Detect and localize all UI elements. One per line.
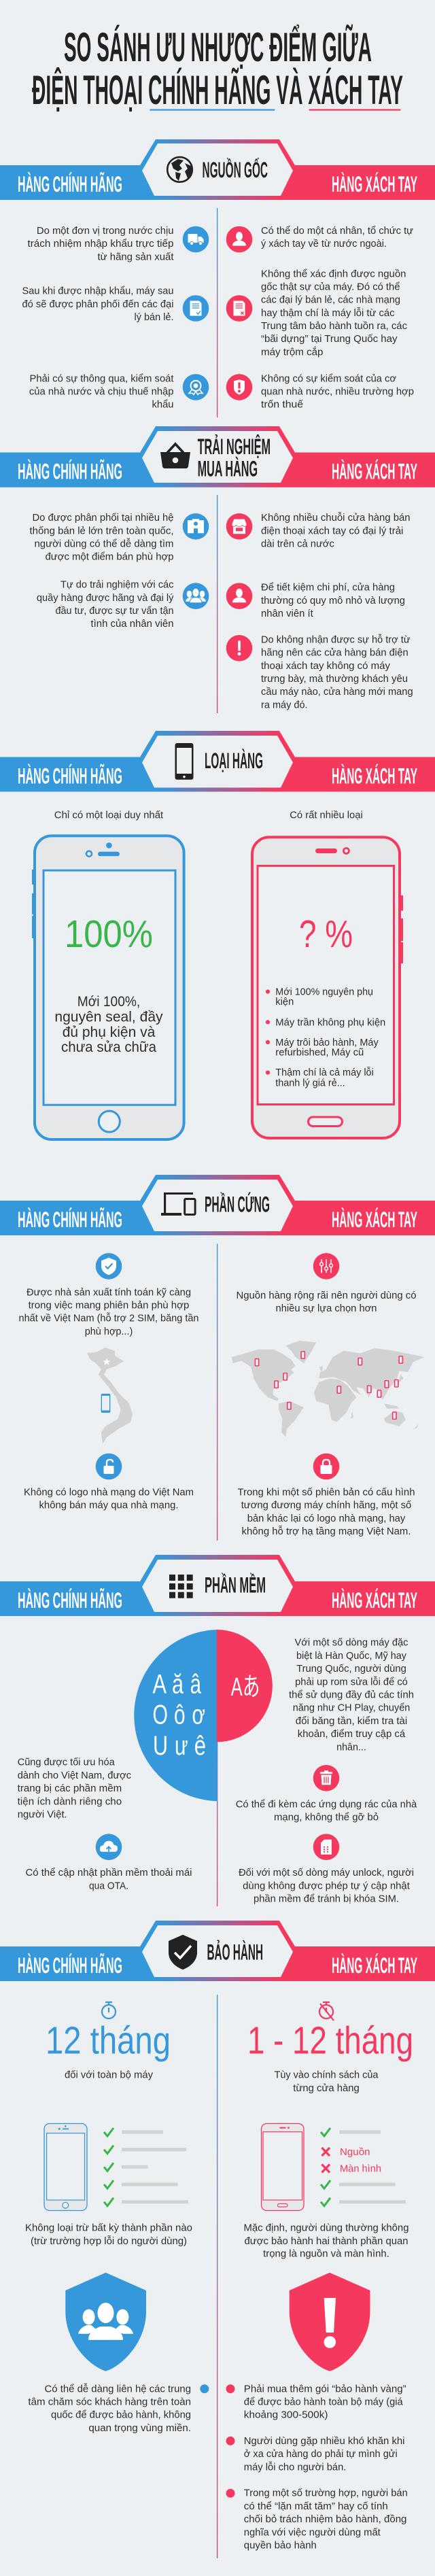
stat: ? %: ? % [299, 912, 353, 956]
text block: Có thể do một cá nhân, tổ chức tự [261, 225, 413, 237]
divider: phần mềm [217, 1630, 218, 1906]
text block [30, 512, 174, 563]
text block: ý xách tay về từ nước ngoài. [261, 238, 387, 250]
icon: person [226, 226, 252, 252]
text block [37, 579, 174, 630]
bullet text: ở xa cửa hàng do phải tự mình gửi [244, 2448, 398, 2460]
text block: Trung Quốc, người dùng [296, 1663, 406, 1675]
panel: bảo hành chính hãng [25, 2002, 209, 2434]
text block [275, 2070, 379, 2094]
icon: people [183, 583, 209, 609]
text block: đủ phụ kiện và [63, 1025, 156, 1040]
icon: person [226, 583, 252, 609]
panel: phần cứng xách tay [232, 1253, 424, 1537]
blue half circle: ă [172, 1670, 184, 1700]
text block [289, 1637, 414, 1753]
text block: được một điểm bán phù hợp [45, 551, 174, 563]
text block: Với một số dòng máy đặc [295, 1637, 408, 1649]
checklist: Nguồn [340, 2146, 370, 2158]
text block: qua OTA. [89, 1880, 128, 1891]
bullet list: thanh lý giá rẻ... [275, 1077, 345, 1089]
panel: phần mềm xách tay [236, 1637, 417, 1905]
bullet text: khoảng 300-500k) [244, 2409, 328, 2421]
text block: người dùng có thể dễ dàng tìm [34, 538, 174, 549]
text block: trốn thuế [261, 399, 304, 411]
text block: đối với toàn bộ máy [65, 2070, 153, 2081]
icon: shield check [169, 1935, 197, 1970]
text block: Do được phân phối tại nhiều hệ [33, 512, 174, 523]
blue half circle: O [152, 1700, 168, 1730]
blue half circle: ô [174, 1700, 186, 1730]
blue half circle: ơ [192, 1700, 205, 1730]
text block: nhất về Việt Nam (hỗ trợ 2 SIM, băng tần [19, 1313, 198, 1324]
text block [261, 225, 413, 250]
blue half circle: â [190, 1670, 202, 1700]
text block: bản khác lại có logo nhà mạng, hay [247, 1513, 406, 1524]
bullet text: nghĩa với việc người dùng mất [244, 2526, 381, 2538]
text block: dành cho Việt Nam, được [18, 1770, 132, 1781]
text block [25, 2222, 192, 2247]
text block: gốc thật sự của máy. Đó có thể [261, 281, 400, 292]
panel: nguồn gốc chính hãng [22, 225, 209, 411]
text block: Không thể xác định được nguồn [261, 268, 406, 279]
checklist [104, 2128, 188, 2206]
text block: Phải có sự thông qua, kiểm soát [30, 373, 174, 385]
text block: đầu tư, được sự tư vấn tận [56, 605, 174, 617]
bullet list: refurbished, Máy cũ [275, 1047, 364, 1059]
icon: document x [226, 295, 252, 322]
bullet text [226, 2488, 408, 2552]
text block: hãng nên các cửa hàng bán điện [261, 647, 408, 659]
text block [236, 1798, 417, 1823]
text block: không bán máy qua nhà mạng. [39, 1500, 178, 1511]
icon: phone [175, 743, 193, 780]
text block: Mặc định, người dùng thường không [243, 2222, 409, 2234]
divider: bảo hành [217, 1995, 218, 2558]
text block: cầu máy nào, cửa hàng mới mang [261, 686, 413, 698]
text block: “bãi dựng” tại Trung Quốc hay [261, 333, 398, 345]
divider: phần cứng [217, 1244, 218, 1541]
blue half circle: A [152, 1670, 167, 1700]
text block: quầy hàng được hãng và đại lý [37, 592, 174, 604]
bullet text [28, 2383, 209, 2434]
map: world with phones [232, 1341, 424, 1437]
icon: sim card [313, 1834, 339, 1860]
icon: exclamation [226, 635, 252, 662]
panel: phần cứng chính hãng [19, 1253, 198, 1511]
bullet list: Mới 100% nguyên phụ [275, 986, 373, 998]
section header: loại hàng: HÀNG CHÍNH HÃNG [18, 764, 122, 789]
section header: phần cứng: HÀNG CHÍNH HÃNG [18, 1207, 122, 1232]
section header: trải nghiệm mua hàng: MUA HÀNG [198, 457, 258, 481]
text block [261, 512, 411, 549]
text block [261, 634, 413, 711]
icon: shield alert [290, 2273, 370, 2371]
blue half circle: ê [194, 1731, 206, 1761]
section header: trải nghiệm mua hàng: TRẢI NGHIỆM [198, 434, 271, 459]
text block: Trung tâm bảo hành tuồn ra, các [261, 320, 407, 332]
text block: biệt là Hàn Quốc, Mỹ hay [296, 1650, 406, 1662]
text block: dùng không được phép tự ý cập nhật [243, 1880, 411, 1891]
icon: shield check [96, 1253, 122, 1280]
text block: khẩu [152, 399, 174, 411]
bullet text: máy lỗi cho người bán. [244, 2461, 346, 2473]
text block: thường có quy mô nhỏ và lượng [261, 595, 405, 606]
text block: tình của nhân viên [91, 618, 174, 630]
text block: năng như CH Play, chuyển [293, 1702, 410, 1714]
section header: phần cứng [0, 1175, 435, 1235]
text block: thể sử dụng đầy đủ các tính [289, 1689, 414, 1701]
text block: trọng là nguồn và màn hình. [263, 2248, 389, 2259]
text block: nhân viên ít [261, 608, 314, 619]
text block [19, 1286, 198, 1337]
section header: bảo hành: BẢO HÀNH [207, 1940, 263, 1965]
icon: award [183, 374, 209, 400]
text block [243, 2222, 409, 2259]
icon: devices [161, 1192, 195, 1216]
phone illustration: blue small [44, 2124, 87, 2211]
section header: loại hàng [0, 731, 435, 791]
bullet text: quốc để được bảo hành, không [51, 2409, 191, 2421]
section header: phần mềm: HÀNG CHÍNH HÃNG [18, 1588, 122, 1613]
phone illustration: blue [32, 836, 184, 1139]
text block: tương đương máy chính hãng, một số [241, 1500, 412, 1511]
panel: loại chính hãng [32, 809, 184, 1139]
bullet text: chối bỏ trách nhiệm bảo hành, đồng [244, 2513, 406, 2525]
text block: của nhà nước và chịu thuế nhập [29, 385, 174, 397]
icon: lock [313, 1454, 339, 1479]
text block: tiện ích dành riêng cho [18, 1796, 122, 1807]
text block: nhân... [336, 1741, 366, 1753]
icon: globe [167, 157, 192, 182]
text block: Do không nhận được sự hỗ trợ từ [261, 634, 411, 646]
text block: quan nhà nước, nhiều trường hợp [261, 385, 414, 397]
section header: bảo hành: HÀNG CHÍNH HÃNG [18, 1953, 122, 1978]
text block: Cũng được tối ưu hóa [18, 1757, 115, 1768]
text block [261, 268, 407, 358]
text block: dài trên cả nước [261, 538, 334, 549]
divider: nguồn gốc [217, 208, 218, 417]
text block [18, 1757, 132, 1821]
text block: trưng bày, mà thường khách yêu [261, 673, 408, 685]
phone illustration: red [252, 837, 403, 1138]
bullet text: có thể “lặn mất tăm” hay cố tính [244, 2501, 388, 2512]
text block: Đối với một số dòng máy unlock, người [239, 1867, 414, 1878]
text block: Không có logo nhà mạng do Việt Nam [24, 1486, 194, 1498]
bullet text: để được bảo hành toàn bộ máy (giá [244, 2396, 403, 2408]
section header: nguồn gốc: HÀNG CHÍNH HÃNG [18, 172, 122, 196]
icon: unlock [96, 1454, 122, 1479]
text block: nhiều sự lựa chọn hơn [276, 1303, 377, 1314]
text block: từng cửa hàng [293, 2082, 360, 2094]
map: Việt Nam [87, 1347, 133, 1444]
icon: stopwatch [102, 2002, 116, 2019]
icon: stopwatch off [319, 2002, 334, 2021]
text block: Có thể đi kèm các ứng dụng rác của nhà [236, 1798, 417, 1810]
text block: trong việc mang phiên bản phù hợp [29, 1300, 189, 1311]
bullet text: Có thể dễ dàng liên hệ các trung [45, 2383, 191, 2394]
bullet list: Máy trôi bảo hành, Máy [275, 1037, 379, 1048]
text block: đó sẽ được phân phối đến các đại [22, 298, 174, 310]
text block: hay thậm chí là máy lỗi từ các [261, 307, 395, 319]
section header: nguồn gốc [0, 139, 435, 200]
stat: 100%: 100% [65, 912, 153, 956]
text block: điện thoại xách tay có đại lý trải [261, 525, 403, 536]
panel: trải nghiệm chính hãng [30, 512, 209, 630]
text block: Không nhiều chuỗi cửa hàng bán [261, 512, 411, 523]
text block: Tự do trải nghiệm với các [60, 579, 174, 591]
text block [24, 1486, 194, 1511]
bullet text: Phải mua thêm gói “bảo hành vàng” [244, 2383, 406, 2394]
section header: trải nghiệm mua hàng [0, 426, 435, 487]
section header: bảo hành [0, 1921, 435, 1981]
text block: từ hãng sản xuất [98, 252, 174, 262]
icon: store [226, 513, 252, 540]
section header: phần mềm: PHẦN MỀM [205, 1573, 266, 1598]
text block: Có thể cập nhật phần mềm thoải mái [26, 1867, 192, 1878]
text block: nguyên seal, đầy [54, 1010, 163, 1025]
text block [26, 1867, 192, 1891]
section header: phần cứng: PHẦN CỨNG [205, 1192, 270, 1217]
bullet text: quan trọng vùng miền. [88, 2422, 191, 2434]
text block: Tùy vào chính sách của [275, 2070, 379, 2081]
text block: đổi băng tần, kiểm tra tài [296, 1715, 407, 1727]
text block: phải up rom sửa lỗi để có [295, 1676, 408, 1687]
text block: thoại xách tay không có máy [261, 660, 390, 672]
text block: trách nhiệm nhập khẩu trực tiếp [27, 238, 173, 250]
text block [261, 582, 405, 619]
text block [238, 1486, 415, 1537]
panel: trải nghiệm xách tay [226, 512, 413, 711]
icon: truck [183, 226, 209, 252]
panel: nguồn gốc xách tay [226, 225, 414, 411]
text block: mạng, không thể gỡ bỏ [274, 1811, 379, 1823]
panel: bảo hành xách tay [226, 2002, 413, 2552]
chart: language half circles [134, 1630, 273, 1801]
text block: Trong khi một số phiên bản có cấu hình [238, 1486, 415, 1498]
checklist: Màn hình [340, 2163, 381, 2174]
section header: trải nghiệm mua hàng: HÀNG CHÍNH HÃNG [18, 460, 122, 484]
text block: Do một đơn vị trong nước chịu [37, 225, 174, 237]
red half circle [217, 1630, 273, 1742]
blue half circle [134, 1630, 218, 1801]
bullet text [226, 2435, 405, 2473]
icon: shield people [65, 2273, 146, 2371]
panel: loại xách tay [252, 809, 403, 1138]
icon: trash [313, 1765, 339, 1791]
red half circle: Aあ [231, 1673, 260, 1702]
blue half circle: U [153, 1731, 168, 1761]
icon: cloud upload [96, 1834, 122, 1860]
text block: khoản, điểm truy cập cá [298, 1728, 406, 1740]
text block: phần mềm để tránh bị khóa SIM. [254, 1893, 399, 1905]
text block: (trừ trường hợp lỗi do người dùng) [31, 2235, 187, 2247]
icon: shield alert [226, 374, 252, 400]
checklist [321, 2128, 406, 2206]
panel: phần mềm chính hãng [18, 1757, 192, 1891]
icon: apple store [183, 513, 209, 540]
text block: Được nhà sản xuất tính toán kỹ càng [27, 1286, 191, 1298]
phone illustration: red small [261, 2124, 304, 2211]
text block [54, 994, 163, 1055]
text block: Nguồn hàng rộng rãi nên người dùng có [237, 1290, 416, 1301]
section header: phần mềm [0, 1555, 435, 1616]
stat: 12 tháng: 12 tháng [46, 2019, 171, 2063]
label: nhiều loại: Có rất nhiều loại [290, 809, 363, 821]
text block: Sau khi được nhập khẩu, máy sau [22, 286, 174, 297]
text block: ra máy đó. [261, 699, 308, 711]
text block: không hỗ trợ hạ tầng mạng Việt Nam. [242, 1526, 411, 1537]
text block: Để tiết kiệm chi phí, cửa hàng [261, 582, 395, 594]
text block [22, 286, 174, 323]
section header: loại hàng: LOẠI HÀNG [205, 749, 263, 773]
text block: Không loại trừ bất kỳ thành phần nào [25, 2222, 192, 2234]
title [32, 24, 403, 113]
text block: Mới 100%, [77, 994, 140, 1010]
blue half circle: ư [175, 1731, 188, 1761]
text block [261, 373, 414, 411]
text block [29, 373, 174, 411]
text block: thống bán lẻ lớn trên toàn quốc, [30, 525, 174, 536]
bullet text: quyền bảo hành [244, 2540, 317, 2552]
text block: các đại lý bán lẻ, các nhà mạng [261, 294, 400, 306]
section header: nguồn gốc: NGUỒN GỐC [203, 158, 268, 182]
text block: trang bị các phần mềm [18, 1783, 122, 1794]
divider: trải nghiệm [217, 495, 218, 713]
text block: phù hợp...) [85, 1326, 133, 1337]
icon: app grid [169, 1575, 193, 1598]
text block: Không có sự kiểm soát của cơ [261, 373, 396, 385]
bullet list: kiện [275, 996, 294, 1008]
icon: sliders [313, 1253, 339, 1280]
bullet text: Người dùng gặp nhiều khó khăn khi [244, 2435, 405, 2447]
bullet list: Thậm chí là cả máy lỗi [275, 1067, 374, 1078]
text block: được bảo hành hai thành phần quan [245, 2235, 408, 2247]
text block [237, 1290, 416, 1314]
bullet text: Trong một số trường hợp, người bán [244, 2488, 408, 2499]
icon: document check [183, 295, 209, 322]
bullet list: Máy trần không phụ kiện [275, 1016, 385, 1028]
text block [239, 1867, 414, 1905]
label: một loại: Chỉ có một loại duy nhất [54, 809, 164, 821]
bullet text: tâm chăm sóc khách hàng trên toàn [28, 2396, 191, 2408]
icon: basket [160, 444, 190, 468]
text block [27, 225, 174, 262]
text block: chưa sửa chữa [61, 1040, 156, 1055]
bullet list [266, 986, 385, 1089]
text block: lý bán lẻ. [135, 311, 174, 323]
text block: máy trộm cắp [261, 346, 323, 358]
bullet text [226, 2383, 406, 2421]
text block: người Việt. [18, 1808, 67, 1821]
